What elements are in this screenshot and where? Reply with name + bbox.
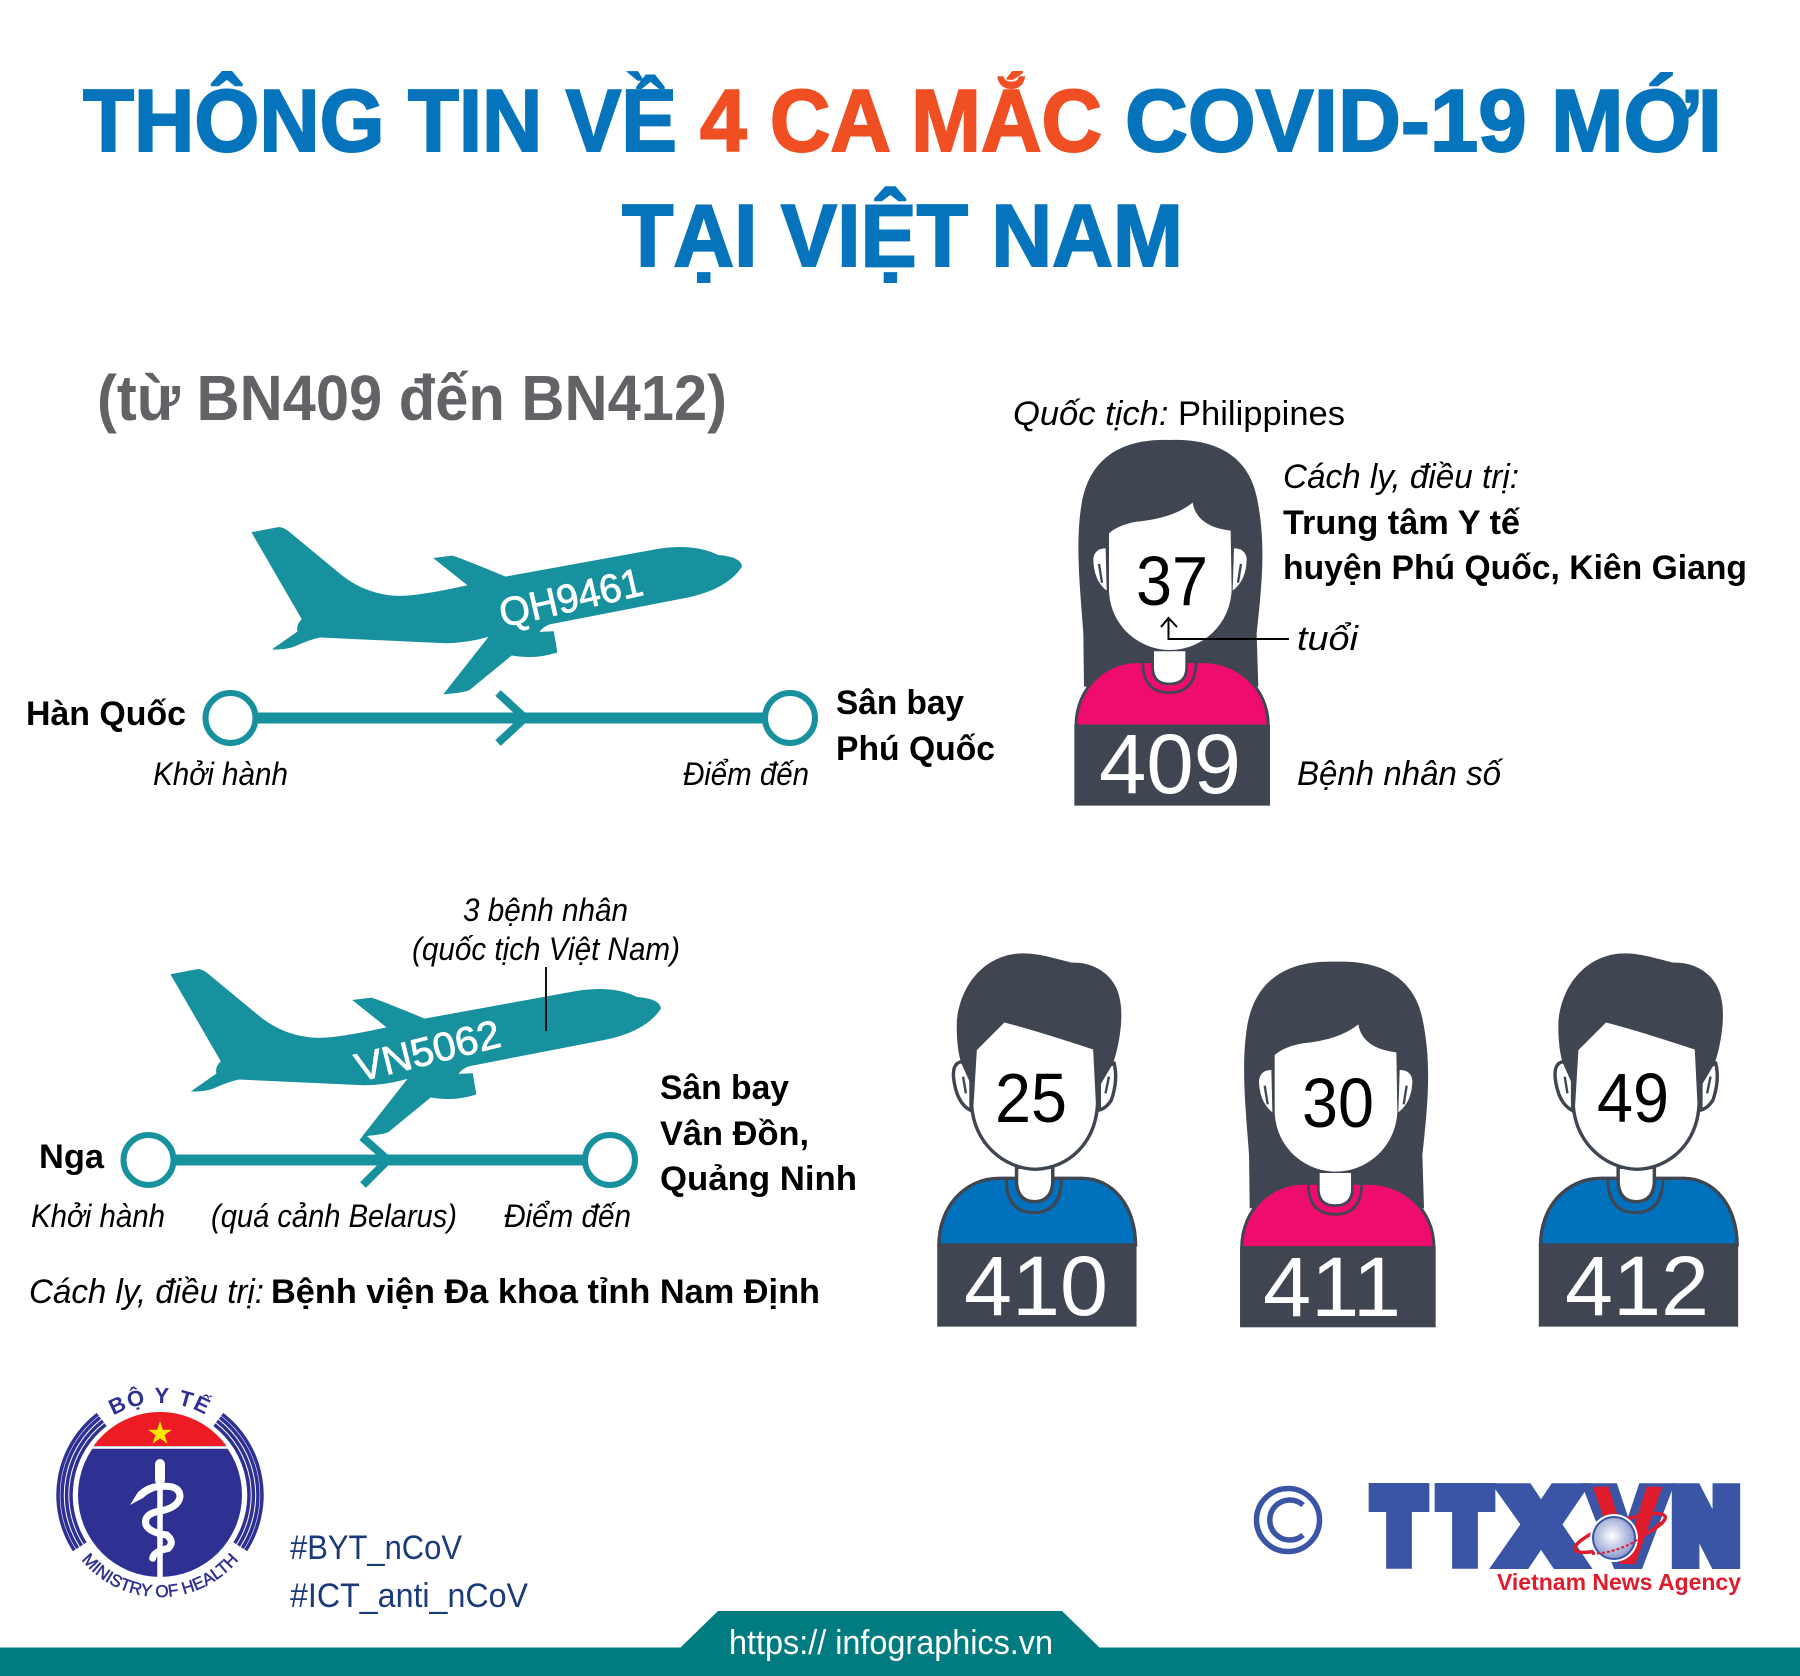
patients caption: 3 bệnh nhân bbox=[463, 892, 628, 928]
patient number caption: Bệnh nhân số bbox=[1297, 755, 1504, 793]
figure: man 412 bbox=[1539, 953, 1738, 1333]
treatment text: Trung tâm Y tế bbox=[1283, 504, 1520, 542]
figure: woman 409 bbox=[1074, 440, 1270, 811]
icon: copyright bbox=[1256, 1488, 1320, 1552]
destination label bbox=[660, 1069, 857, 1198]
hashtags: #ICT_anti_nCoV bbox=[290, 1577, 528, 1615]
patients caption bbox=[412, 892, 680, 967]
destination label: Sân bay bbox=[836, 684, 964, 722]
age caption: tuổi bbox=[1297, 620, 1360, 658]
logo: TTXVN: T bbox=[1375, 1471, 1423, 1581]
route line bbox=[206, 693, 815, 743]
arrow: age pointer bbox=[1161, 618, 1289, 639]
logo: TTXVN: V bbox=[1594, 1471, 1662, 1581]
route captions: (quá cảnh Belarus) bbox=[211, 1198, 457, 1234]
destination label: Quảng Ninh bbox=[660, 1160, 857, 1198]
logo: TTXVN: T bbox=[1441, 1471, 1489, 1581]
origin label: Nga bbox=[39, 1138, 105, 1176]
title bbox=[83, 71, 1722, 285]
logo: TTXVN: N bbox=[1674, 1471, 1738, 1581]
destination label: Phú Quốc bbox=[836, 730, 995, 768]
logo: Ministry of Health: BỘ Y TẾ bbox=[108, 1386, 213, 1415]
figure: man 410: 25 bbox=[995, 1059, 1067, 1137]
destination label: Vân Đồn, bbox=[660, 1115, 809, 1153]
nationality: Quốc tịch: Philippines bbox=[1013, 395, 1345, 433]
route line bbox=[124, 1135, 635, 1185]
treatment text: Bệnh viện Đa khoa tỉnh Nam Định bbox=[271, 1273, 820, 1311]
treatment text: Cách ly, điều trị: bbox=[29, 1273, 264, 1311]
figure: woman 409: 409 bbox=[1099, 717, 1241, 811]
figure: woman 411: 411 bbox=[1263, 1240, 1401, 1334]
logo: Ministry of Health bbox=[56, 1386, 264, 1598]
icon: airplane VN5062: VN5062 bbox=[351, 1012, 505, 1091]
route captions: Khởi hành bbox=[31, 1198, 165, 1234]
figure: woman 411 bbox=[1240, 962, 1436, 1334]
hashtags bbox=[290, 1529, 528, 1615]
title: 4 CA MẮC bbox=[700, 71, 1102, 170]
route captions bbox=[31, 1198, 631, 1234]
icon: airplane QH9461: QH9461 bbox=[495, 560, 647, 636]
logo: Ministry of Health: MINISTRY OF HEALTH bbox=[82, 1552, 238, 1598]
hashtags: #BYT_nCoV bbox=[290, 1529, 462, 1567]
logo: TTXVN bbox=[1375, 1463, 1741, 1595]
logo: TTXVN: X bbox=[1506, 1471, 1576, 1581]
panel: flight QH9461 bbox=[26, 527, 995, 792]
departure caption: Khởi hành bbox=[153, 756, 288, 792]
treatment text: huyện Phú Quốc, Kiên Giang bbox=[1283, 549, 1747, 587]
title: TẠI VIỆT NAM bbox=[622, 186, 1183, 285]
destination label: Sân bay bbox=[660, 1069, 789, 1107]
figure: woman 411: 30 bbox=[1302, 1064, 1374, 1142]
destination label bbox=[836, 684, 995, 768]
subtitle: (từ BN409 đến BN412) bbox=[97, 362, 727, 434]
origin label: Hàn Quốc bbox=[26, 695, 186, 733]
icon: airplane QH9461 bbox=[251, 527, 742, 694]
figure: man 412: 412 bbox=[1565, 1239, 1709, 1333]
treatment text bbox=[1283, 458, 1747, 587]
title: COVID-19 MỚI bbox=[1125, 71, 1722, 170]
treatment text bbox=[29, 1273, 820, 1311]
figure: man 410: 410 bbox=[964, 1239, 1108, 1333]
logo: TTXVN: V bbox=[1592, 1463, 1663, 1588]
route captions: Điểm đến bbox=[504, 1198, 631, 1234]
icon: airplane VN5062 bbox=[170, 967, 661, 1136]
patients caption: (quốc tịch Việt Nam) bbox=[412, 931, 680, 967]
panel: patient 409 bbox=[1013, 395, 1747, 811]
logo: TTXVN: Vietnam News Agency bbox=[1497, 1569, 1741, 1595]
treatment text: Cách ly, điều trị: bbox=[1283, 458, 1519, 496]
footer bar bbox=[0, 1611, 1800, 1676]
figure: man 412: 49 bbox=[1597, 1059, 1669, 1137]
title: THÔNG TIN VỀ bbox=[83, 71, 677, 170]
panel: flight VN5062 bbox=[29, 892, 857, 1311]
footer bar: https:// infographics.vn bbox=[729, 1624, 1053, 1662]
figure: woman 409: 37 bbox=[1136, 542, 1208, 620]
destination caption: Điểm đến bbox=[683, 756, 809, 792]
figure: man 410 bbox=[937, 953, 1137, 1333]
